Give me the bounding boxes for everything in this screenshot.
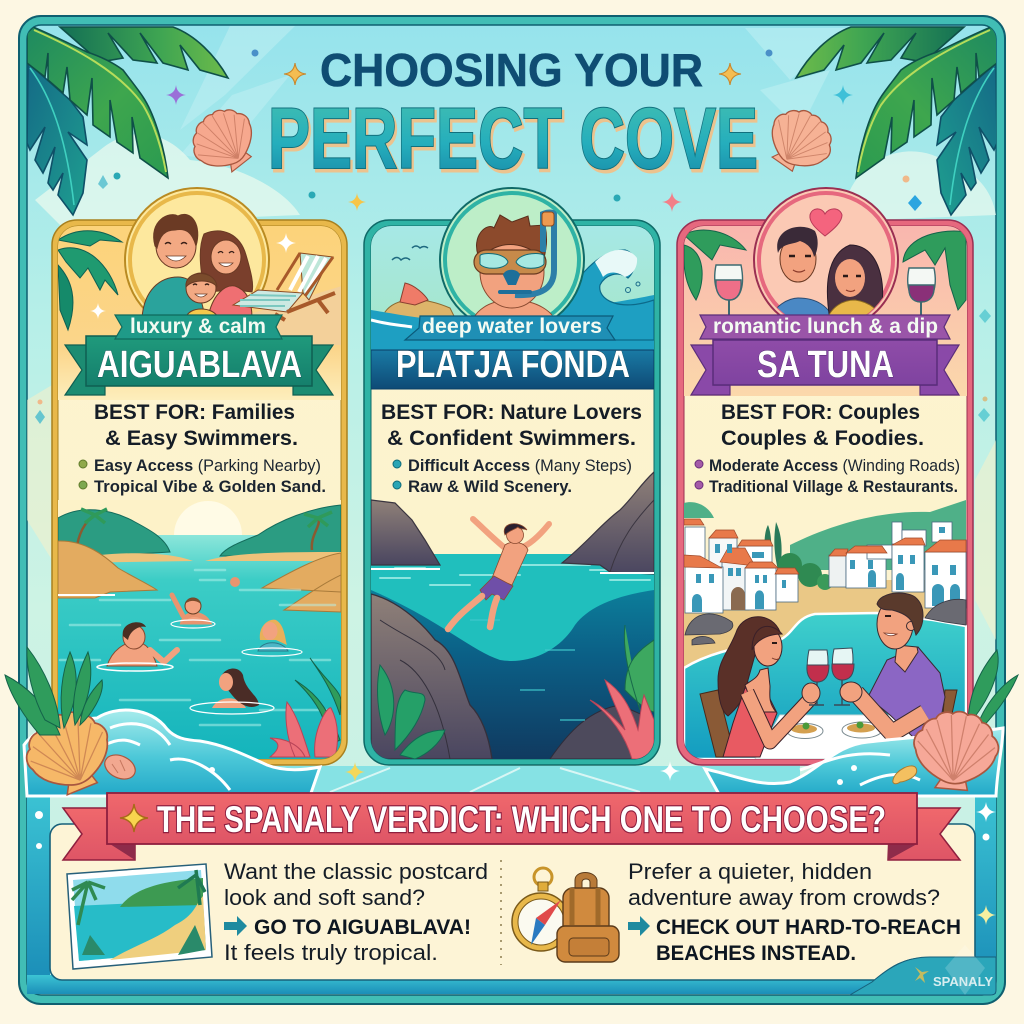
text: best for families (94, 401, 298, 450)
icon: shell left of title (181, 97, 268, 184)
circle portrait: family (90, 188, 296, 332)
circle portrait: snorkeler (440, 188, 584, 332)
hands (802, 682, 862, 703)
list: Platja Fonda features (393, 456, 632, 496)
list: Aiguablava features (79, 456, 326, 496)
palm leaves top right (796, 27, 997, 215)
text: left verdict: Want the classic postcard (224, 859, 488, 884)
icon: arrow (224, 916, 247, 936)
title line two: PERFECT COVE (270, 94, 760, 190)
wave left (24, 710, 320, 796)
icon: backpack (557, 872, 619, 962)
table (754, 714, 912, 759)
sparkles (276, 233, 296, 253)
ribbon: Aiguablava (65, 336, 333, 395)
list: Sa Tuna features (695, 456, 960, 496)
list: Platja Fonda features: Difficult Access (Many Steps) (408, 456, 632, 475)
ribbon: Aiguablava: AIGUABLAVA (97, 344, 302, 386)
icon: arrow (628, 916, 650, 936)
scene: village and couple (684, 500, 966, 759)
circle portrait: couple (753, 187, 899, 314)
text: best for families: BEST FOR: Families (94, 401, 295, 424)
icon: wine glass right (908, 268, 935, 316)
text: left verdict: It feels truly tropical. (224, 940, 438, 965)
title (268, 44, 760, 190)
ribbon: luxury & calm: luxury & calm (130, 315, 266, 338)
banner tails (63, 808, 960, 860)
title line one: CHOOSING YOUR (320, 44, 703, 96)
corner wave (850, 957, 996, 995)
panel: Sa Tuna (677, 188, 973, 765)
text: best for families: & Easy Swimmers. (105, 427, 298, 450)
watermark: SPANALY (933, 974, 993, 989)
panel: Platja Fonda (364, 188, 660, 765)
birds (392, 246, 428, 260)
village buildings (685, 522, 966, 613)
icon: heart (810, 209, 842, 236)
lower water field (27, 761, 996, 994)
icon: small pebble shell right (893, 766, 917, 784)
diver (448, 519, 549, 629)
ribbon: romantic lunch: romantic lunch & a dip (713, 315, 938, 338)
woman arm skin (747, 692, 812, 742)
scene: cliffs and deep water (371, 472, 654, 759)
seaweed and coral (270, 658, 341, 757)
divider (500, 860, 502, 965)
text: best for nature lovers (381, 401, 642, 450)
leaves in header (684, 230, 966, 310)
text: best for nature lovers: BEST FOR: Nature Lovers (381, 401, 642, 424)
text: left verdict (224, 859, 488, 965)
swimmer blonde (242, 620, 302, 656)
text: best for couples: BEST FOR: Couples (721, 401, 920, 424)
man arm skin (856, 693, 925, 733)
decorative sparkles and dots (35, 50, 991, 424)
header background (684, 226, 967, 396)
seagrass right (968, 650, 1018, 735)
text: right verdict: BEACHES INSTEAD. (656, 942, 856, 965)
text: right verdict (628, 859, 961, 965)
ribbon: Sa Tuna: SA TUNA (757, 344, 894, 386)
text: right verdict: adventure away from crowds? (628, 885, 940, 910)
title line two: PERFECT COVE (268, 91, 758, 187)
text: left verdict: look and soft sand? (224, 885, 425, 910)
list: Sa Tuna features: Traditional Village & Restaurants. (709, 477, 958, 496)
illustration: postcard (67, 864, 212, 969)
list: Aiguablava features: Tropical Vibe & Golden Sand. (94, 477, 326, 496)
text: best for nature lovers: & Confident Swimmers. (387, 427, 636, 450)
woman arm (747, 692, 812, 742)
icon: compass (512, 868, 570, 951)
icon: wine glass left (715, 265, 742, 316)
text: best for couples (721, 401, 924, 450)
wine glasses clinking (807, 648, 854, 705)
text: right verdict: CHECK OUT HARD-TO-REACH (656, 916, 961, 939)
swimmer far (230, 577, 240, 587)
text: left verdict: GO TO AIGUABLAVA! (254, 916, 471, 939)
icon: small pebble shell left (101, 750, 139, 784)
ribbon: deep water lovers: deep water lovers (422, 315, 602, 338)
text: right verdict: Prefer a quieter, hidden (628, 859, 872, 884)
chairs (700, 690, 957, 757)
list: Platja Fonda features: Raw & Wild Scenery. (408, 477, 572, 496)
panel: Aiguablava (52, 188, 347, 765)
icon: mask and snorkel (474, 212, 554, 295)
water band (371, 295, 654, 352)
swimmer dark hair (190, 669, 274, 714)
rocks (685, 599, 966, 645)
panel: verdict (50, 793, 996, 995)
swimmer man (97, 622, 177, 671)
woman (718, 617, 782, 757)
swimmer child (171, 595, 215, 628)
header background (58, 226, 341, 400)
text: best for couples: Couples & Foodies. (721, 427, 924, 450)
icon: shell bottom right (910, 708, 1001, 793)
watermark (915, 945, 993, 995)
island (385, 300, 455, 318)
header background (371, 226, 654, 316)
icon: sun lounger (233, 253, 335, 320)
icon: shell right of title (757, 98, 843, 183)
wave (545, 250, 654, 340)
palm in header (58, 231, 122, 330)
list: Aiguablava features: Easy Access (Parking Nearby) (94, 456, 321, 475)
seagrass left (5, 647, 102, 735)
heading: Platja Fonda: PLATJA FONDA (396, 344, 630, 386)
man (868, 593, 945, 737)
man arm (856, 693, 925, 733)
palm leaves top left (27, 27, 228, 215)
scene: cove with swimmers (58, 500, 341, 759)
ribbon: Sa Tuna (691, 340, 959, 395)
family figures (142, 214, 253, 318)
banner heading (107, 793, 917, 844)
icon: shell bottom left (15, 700, 123, 804)
list: Sa Tuna features: Moderate Access (Winding Roads) (709, 456, 960, 475)
plates (787, 722, 882, 738)
wave right (705, 728, 1003, 796)
